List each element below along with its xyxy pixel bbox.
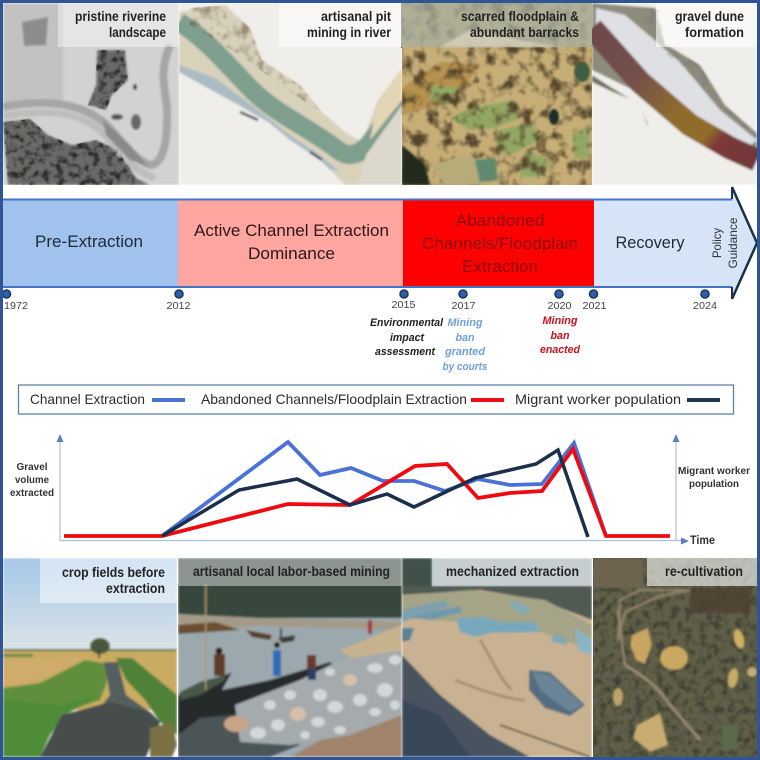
label: artisanal pit mining in river: mining in river xyxy=(307,25,392,40)
label: gravel dune formation: gravel dune xyxy=(675,9,744,24)
annotation: Mining ban granted by courts xyxy=(442,317,488,373)
label: pristine riverine landscape: pristine riverine xyxy=(75,9,166,24)
marker: 1972 xyxy=(2,290,28,312)
photo strip: bottom ground images xyxy=(3,558,757,757)
annotation: Mining ban enacted: enacted xyxy=(540,344,580,356)
label: crop fields before extraction xyxy=(40,558,177,603)
photo: re-cultivation xyxy=(593,558,757,757)
series: migrant worker population xyxy=(162,450,588,537)
photo: mechanized extraction xyxy=(402,558,592,757)
timeline markers and years xyxy=(2,290,717,312)
photo: crop fields before extraction xyxy=(3,558,177,757)
annotation: Mining ban enacted: ban xyxy=(550,330,570,342)
label: re-cultivation xyxy=(647,558,757,586)
label: scarred floodplain and abundant barracks: scarred floodplain & xyxy=(461,9,579,24)
marker: 2012: 2012 xyxy=(166,300,191,312)
phase: Active Channel Extraction Dominance: Active Channel Extraction xyxy=(194,221,389,240)
label: scarred floodplain and abundant barracks: abundant barracks xyxy=(470,25,579,40)
label: Policy Guidance: Policy xyxy=(710,228,724,258)
marker: 2024 xyxy=(693,290,717,312)
label: Policy Guidance: Guidance xyxy=(726,217,740,268)
photo: artisanal pit mining in river xyxy=(179,3,402,185)
timeline arrow with phases xyxy=(3,187,757,299)
photo labels: bottom row xyxy=(40,558,757,603)
photo: scarred floodplain and abundant barracks xyxy=(402,3,592,185)
axis label: Gravel volume extracted: extracted xyxy=(10,488,54,499)
axis label: Time: Time xyxy=(690,535,715,547)
line chart xyxy=(10,434,750,547)
label: pristine riverine landscape xyxy=(58,3,179,47)
photo: gravel dune formation xyxy=(592,3,757,185)
phase: Pre-Extraction xyxy=(3,200,178,287)
marker: 2015 xyxy=(392,290,416,311)
axis label: Migrant worker population: population xyxy=(689,479,739,490)
annotation: Environmental impact assessment: Environmental xyxy=(370,317,444,329)
legend item: Channel Extraction: Channel Extraction xyxy=(30,391,145,407)
series: channel extraction xyxy=(162,442,606,536)
marker: 2017 xyxy=(452,290,476,312)
marker: 2021: 2021 xyxy=(582,300,607,312)
annotation: Mining ban granted by courts: Mining xyxy=(448,317,483,329)
marker: 2021 xyxy=(582,290,607,312)
photo strip: top aerial images xyxy=(3,3,757,185)
marker: 2024: 2024 xyxy=(693,300,717,312)
label: pristine riverine landscape: landscape xyxy=(109,25,166,40)
label: gravel dune formation: formation xyxy=(685,25,744,40)
axis label: Gravel volume extracted xyxy=(10,462,54,499)
marker: 2015: 2015 xyxy=(392,299,416,311)
marker: 2020: 2020 xyxy=(548,300,572,312)
label: gravel dune formation xyxy=(656,3,757,47)
legend item: Abandoned Channels/Floodplain Extraction: Abandoned Channels/Floodplain Extraction xyxy=(201,391,467,407)
label: mechanized extraction: mechanized extraction xyxy=(446,564,579,579)
axis label: Migrant worker population: Migrant worker xyxy=(678,466,750,477)
label: artisanal local labor-based mining xyxy=(178,558,402,586)
arrow outline xyxy=(3,187,757,299)
label: crop fields before extraction: crop fields before xyxy=(62,565,165,580)
phase: Active Channel Extraction Dominance: Dominance xyxy=(248,244,335,263)
phase: Abandoned Channels/Floodplain Extraction xyxy=(403,200,594,287)
phase: Abandoned Channels/Floodplain Extraction: Channels/Floodplain xyxy=(422,234,578,253)
label: crop fields before extraction: extraction xyxy=(106,581,165,596)
phase: Abandoned Channels/Floodplain Extraction: Abandoned xyxy=(456,211,544,230)
label: Policy Guidance xyxy=(710,217,740,268)
annotation: Environmental impact assessment: impact xyxy=(390,332,425,344)
phase: Recovery: Recovery xyxy=(616,233,685,252)
marker: 2017: 2017 xyxy=(452,300,476,312)
label: artisanal pit mining in river xyxy=(279,3,402,47)
annotation: Mining ban granted by courts: granted xyxy=(444,346,485,358)
annotation: Mining ban granted by courts: by courts xyxy=(442,361,488,373)
annotation: Environmental impact assessment xyxy=(370,317,444,358)
marker: 2020 xyxy=(548,290,572,312)
marker: 2012 xyxy=(166,290,191,312)
annotation: Mining ban enacted xyxy=(540,315,580,356)
legend item: Migrant worker population: Migrant worker population xyxy=(515,391,681,407)
label: artisanal local labor-based mining: artisanal local labor-based mining xyxy=(193,564,390,579)
label: scarred floodplain and abundant barracks xyxy=(461,9,579,40)
annotation: Mining ban enacted: Mining xyxy=(542,315,578,327)
marker: 1972: 1972 xyxy=(4,300,28,312)
annotation: Mining ban granted by courts: ban xyxy=(456,332,475,344)
phase: Active Channel Extraction Dominance xyxy=(178,200,403,287)
phase: Pre-Extraction: Pre-Extraction xyxy=(35,232,143,251)
label: artisanal pit mining in river: artisanal pit xyxy=(321,9,391,24)
photo: artisanal local labor-based mining xyxy=(178,558,402,757)
series: abandoned channels/floodplain extraction xyxy=(64,449,670,536)
annotation: Environmental impact assessment: assessment xyxy=(375,346,436,358)
axis label: Gravel volume extracted: Gravel xyxy=(16,462,48,473)
photo: pristine riverine landscape xyxy=(3,3,179,185)
phase: Abandoned Channels/Floodplain Extraction: Extraction xyxy=(462,257,538,276)
axes xyxy=(56,434,689,544)
label: re-cultivation: re-cultivation xyxy=(665,564,743,579)
legend xyxy=(18,385,734,414)
label: mechanized extraction xyxy=(432,558,592,586)
axis label: Gravel volume extracted: volume xyxy=(15,475,49,486)
axis label: Migrant worker population xyxy=(678,466,750,490)
photo labels: top row xyxy=(58,3,757,47)
